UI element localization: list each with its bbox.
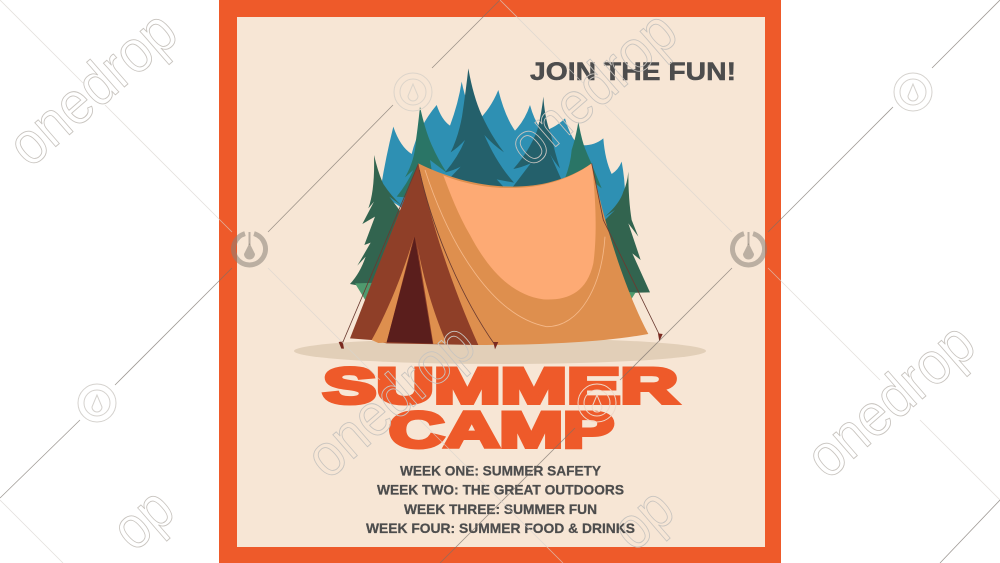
tent body <box>418 163 648 345</box>
tent pegs <box>339 333 663 349</box>
logo left edge <box>234 232 266 265</box>
poster border <box>219 0 781 563</box>
door flaps <box>372 237 414 343</box>
seam <box>425 170 605 327</box>
watermark wordmarks: onedrop <box>793 309 987 491</box>
ground shadow <box>294 338 706 364</box>
logo lower center <box>578 384 616 422</box>
tent left side <box>350 163 478 345</box>
guy ropes <box>342 163 660 345</box>
schedule list <box>366 462 635 536</box>
watermark wordmarks: op <box>599 474 686 563</box>
schedule list: WEEK THREE: SUMMER FUN <box>404 501 597 517</box>
light green tree bases <box>355 283 380 303</box>
tent door <box>387 237 433 344</box>
logo right edge <box>732 232 764 265</box>
dark teal trees <box>440 68 562 188</box>
watermark wordmarks: op <box>99 474 186 563</box>
watermark wordmarks: onedrop <box>293 309 487 491</box>
back blue trees <box>380 82 625 227</box>
logo top right <box>894 73 932 111</box>
dark green trees <box>350 155 650 293</box>
schedule list: WEEK FOUR: SUMMER FOOD & DRINKS <box>366 520 635 536</box>
watermark logos <box>78 73 932 422</box>
title: summer: SUMMER <box>323 358 678 414</box>
illustration: tent and pine trees <box>339 68 663 349</box>
title: camp: CAMP <box>389 402 614 458</box>
schedule list: WEEK TWO: THE GREAT OUTDOORS <box>377 482 624 498</box>
heading: join the fun: JOIN THE FUN! <box>530 58 736 86</box>
teal green trees <box>397 107 602 200</box>
logo top center <box>394 73 432 111</box>
schedule list: WEEK ONE: SUMMER SAFETY <box>400 462 602 478</box>
logo lower left <box>78 384 116 422</box>
tent light panel <box>443 163 596 299</box>
poster background <box>237 17 765 547</box>
